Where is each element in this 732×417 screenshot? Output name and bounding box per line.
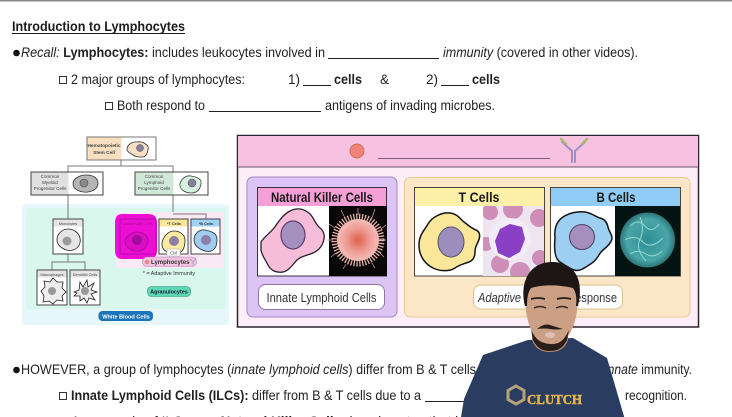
text block: both respond [106, 97, 495, 113]
icon: antibody [561, 139, 587, 162]
text block: both respond: antigens of invading microbes. [325, 97, 495, 113]
label: agranulocytes: Agranulocytes [150, 290, 188, 296]
box: hematopoietic stem cell: Hematopoietic [87, 143, 121, 149]
box: common lymphoid progenitor [135, 172, 208, 195]
diagram: white blood cell lineage [22, 137, 229, 325]
box: dendritic cells: Dendritic Cells [73, 273, 97, 277]
text block: innate lymphoid cells line: Innate Lymphoid Cells (ILCs): differ from B & T cells due to a [71, 387, 421, 403]
card: T cells [414, 188, 548, 282]
box: common lymphoid progenitor: Lymphoid [144, 180, 164, 185]
box: T cells [159, 219, 188, 254]
card: natural killer cells [258, 188, 387, 276]
text block: however line [13, 361, 692, 377]
label: innate lymphoid cells [258, 284, 384, 310]
box: hematopoietic stem cell: Stem Cell [93, 150, 115, 156]
icon: T cell drawing [419, 213, 480, 271]
text block: 2 major groups: cells [334, 71, 362, 87]
text block: 2 major groups: 1) [288, 71, 300, 87]
eyebrows and eyes [531, 298, 571, 299]
box: common myeloid progenitor [31, 172, 103, 195]
header blank line [378, 158, 550, 159]
card: natural killer cells: Natural Killer Cells [271, 190, 373, 205]
label: adaptive immune response: Adaptive Immune Response [477, 290, 617, 305]
label: lymphocytes: Lymphocytes [151, 260, 190, 266]
label: white blood cells: White Blood Cells [102, 314, 150, 320]
label: lymphocytes [142, 257, 196, 266]
box: B cells: *B Cells [199, 222, 213, 226]
text block: 2 major groups [60, 71, 500, 87]
text block: innate lymphoid cells line: recognition. [625, 387, 687, 403]
label: white blood cells [98, 311, 153, 321]
card: B cells: B Cells [596, 190, 636, 205]
box: common myeloid progenitor: Common [41, 174, 60, 179]
card: B cells [550, 188, 680, 276]
callout: CD1 tag [167, 249, 180, 256]
label: innate lymphoid cells: Innate Lymphoid Cells [266, 290, 377, 305]
panel: agranulocytes background [26, 208, 226, 309]
label: agranulocytes [148, 286, 190, 296]
shirt [461, 338, 630, 417]
card: T cells: T Cells [458, 190, 500, 205]
panel: lymphocytes background [116, 212, 224, 268]
text block: both respond: Both respond to [117, 97, 205, 113]
text block: 2 major groups: cells [472, 71, 500, 87]
box: T cells: *T Cells [167, 222, 181, 226]
box: common myeloid progenitor: Myeloid [42, 180, 58, 185]
box: macrophages: Macrophages [40, 273, 64, 277]
icon: B cell drawing [555, 212, 612, 270]
text block: however line: HOWEVER, a group of lymphocytes (innate lymphoid cells) differ from B & T cells [21, 361, 476, 377]
eyes [534, 306, 568, 308]
text block: recall line: immunity (covered in other videos). [443, 44, 638, 60]
neck [532, 330, 568, 352]
box: B cells [191, 219, 220, 254]
text block: 2 major groups: 2 major groups of lymphocytes: [71, 71, 245, 87]
photo: NK cell micrograph [327, 206, 387, 276]
presenter [461, 262, 630, 417]
text block: recall line: Recall: Lymphocytes: includes leukocytes involved in [21, 44, 325, 60]
photo: B cell micrograph [615, 206, 680, 276]
logo: Clutch [508, 386, 582, 408]
box: common lymphoid progenitor: Common [145, 174, 164, 179]
box: common lymphoid progenitor: Progenitor Cells [138, 186, 171, 191]
box: monocytes: Monocytes [59, 222, 77, 226]
box: macrophages [37, 270, 67, 305]
text block: recall line [13, 44, 638, 60]
text block: innate lymphoid cells line [60, 387, 687, 403]
hair [523, 262, 580, 306]
highlight: magenta natural killer box: Natural Killer Cells [121, 222, 153, 226]
highlight: magenta natural killer box [115, 214, 157, 259]
head [525, 263, 578, 345]
panel: white blood cells background [22, 204, 229, 325]
logo: Clutch: CLUTCH [527, 393, 582, 408]
mouth [545, 332, 555, 338]
icon: NK cell drawing [261, 209, 324, 272]
panel: lymphocyte comparison [238, 136, 698, 327]
text block: 2 major groups: 2) [426, 71, 438, 87]
box: hematopoietic stem cell [87, 137, 156, 160]
panel: adaptive group [404, 178, 690, 317]
icon: red antigen circle [350, 144, 364, 158]
label: adaptive immune response [474, 285, 622, 309]
text block: however line: innate immunity. [605, 361, 692, 377]
box: common myeloid progenitor: Progenitor Cells [34, 186, 67, 191]
panel header [238, 136, 698, 168]
title: Introduction to Lymphocytes [12, 18, 185, 34]
text block: 2 major groups: & [380, 71, 390, 87]
panel: innate group [247, 177, 397, 317]
note: adaptive immunity: * = Adaptive Immunity [143, 271, 195, 277]
callout: CD1 tag: Cbl [170, 250, 177, 256]
box: monocytes [53, 219, 83, 254]
photo: T cell micrograph [483, 206, 544, 276]
beard and moustache [531, 324, 569, 351]
box: dendritic cells [70, 270, 100, 305]
